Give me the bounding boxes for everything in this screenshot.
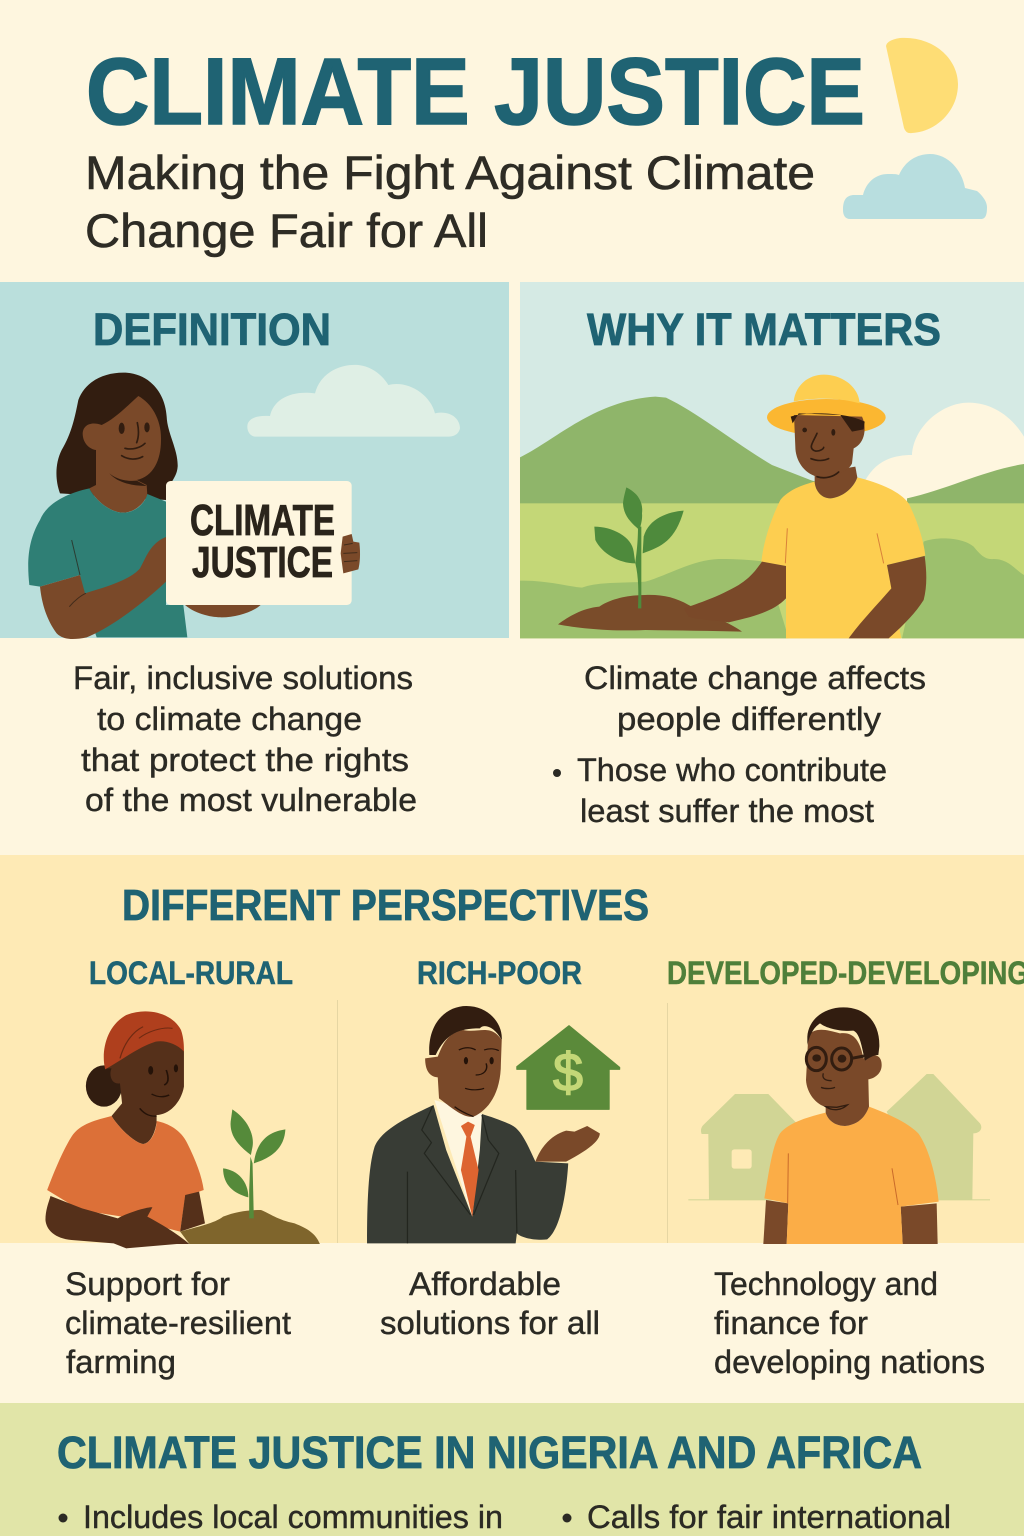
- sign text: CLIMATE: [190, 496, 335, 545]
- illustration: man with glasses and houses: [688, 1007, 990, 1244]
- panel: different perspectives: [0, 855, 1024, 1248]
- text: developed-developing: finance for: [714, 1305, 868, 1341]
- text: definition: to climate change: [97, 701, 362, 737]
- text: local-rural: farming: [66, 1344, 176, 1380]
- illustration: man in suit with house: [367, 1006, 620, 1243]
- text: local-rural: climate-resilient: [65, 1305, 291, 1341]
- panel: why it matters: [520, 282, 1024, 638]
- subtitle: Change Fair for All: [85, 204, 488, 257]
- sign text: JUSTICE: [192, 538, 333, 587]
- heading: nigeria and africa: CLIMATE JUSTICE IN NIGERIA AND AFRICA: [57, 1427, 922, 1478]
- subtitle: [85, 146, 815, 257]
- text: rich-poor: Affordable: [409, 1266, 561, 1302]
- title: CLIMATE JUSTICE: [86, 39, 865, 145]
- bullet: international: Calls for fair international: [587, 1499, 951, 1535]
- text: local-rural: [65, 1266, 291, 1380]
- icon: cloud: [843, 154, 987, 219]
- heading: why it matters: WHY IT MATTERS: [587, 304, 941, 355]
- text: why it matters: Those who contribute: [577, 752, 887, 788]
- text: why it matters: [553, 660, 926, 829]
- text: definition: Fair, inclusive solutions: [73, 660, 413, 696]
- panel: nigeria and africa: [0, 1403, 1024, 1536]
- sign text: [190, 496, 335, 587]
- text: why it matters: least suffer the most: [580, 793, 874, 829]
- text: rich-poor: solutions for all: [380, 1305, 600, 1341]
- text: developed-developing: developing nations: [714, 1344, 985, 1380]
- illustration: rural woman with seedling: [45, 1011, 320, 1248]
- text: definition: that protect the rights: [81, 742, 409, 778]
- text: definition: of the most vulnerable: [85, 782, 417, 818]
- heading: definition: DEFINITION: [93, 304, 331, 355]
- icon: sun: [886, 38, 958, 133]
- subheading: rich-poor: RICH-POOR: [417, 955, 582, 991]
- text: developed-developing: Technology and: [714, 1266, 938, 1302]
- header: [85, 38, 987, 257]
- panel: definition: [0, 282, 509, 639]
- text: why it matters: Climate change affects: [584, 660, 926, 696]
- illustration: farmer with seedling: [520, 375, 1024, 638]
- bullet: local communities: Includes local communities in: [83, 1499, 503, 1535]
- text: definition: [73, 660, 417, 818]
- text: why it matters: people differently: [617, 701, 881, 737]
- text: rich-poor: [380, 1266, 600, 1341]
- subtitle: Making the Fight Against Climate: [85, 146, 815, 199]
- text: developed-developing: [714, 1266, 985, 1380]
- icon: dollar sign: $: [553, 1043, 583, 1103]
- text: local-rural: Support for: [65, 1266, 230, 1302]
- illustration: woman holding sign: [28, 365, 460, 639]
- subheading: local-rural: LOCAL-RURAL: [89, 955, 293, 991]
- heading: different perspectives: DIFFERENT PERSPECTIVES: [122, 881, 649, 930]
